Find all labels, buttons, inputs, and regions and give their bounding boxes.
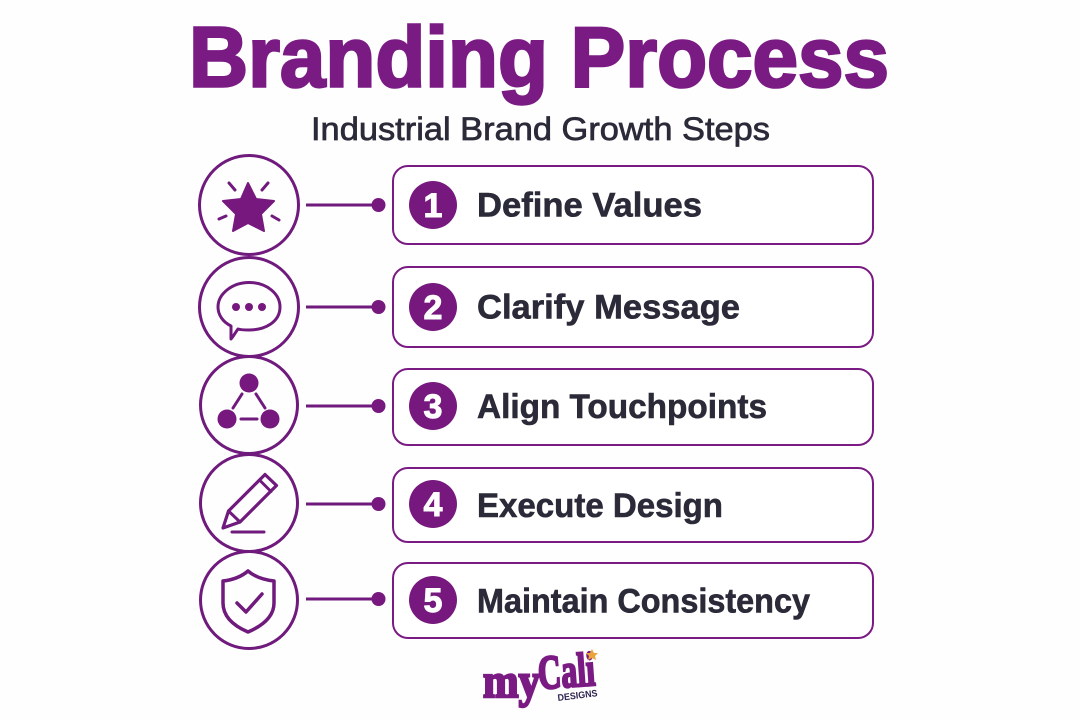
connector 3 — [306, 399, 386, 413]
label 3: Align Touchpoints — [477, 388, 767, 426]
logo: myCali Designs: my — [483, 655, 540, 708]
card 4 — [393, 468, 873, 542]
label 2: Clarify Message — [477, 288, 740, 326]
logo: myCali Designs: DESIGNS — [557, 688, 598, 704]
number badge 1: 1 — [424, 187, 442, 225]
icon: shield check — [200, 552, 298, 648]
icon: network triangle — [200, 356, 298, 454]
number badge 4 — [409, 480, 457, 528]
step 4: execute design — [200, 454, 873, 552]
step 5: maintain consistency — [200, 552, 873, 648]
label 5: Maintain Consistency — [477, 582, 810, 620]
number badge 2: 2 — [424, 289, 442, 327]
number badge 4: 4 — [424, 486, 443, 524]
number badge 3 — [409, 382, 457, 430]
connector 5 — [306, 592, 386, 606]
card 1 — [393, 166, 873, 244]
connector 2 — [306, 300, 386, 314]
subtitle: Industrial Brand Growth Steps — [311, 111, 770, 147]
connector 4 — [306, 497, 386, 511]
card 5 — [393, 563, 873, 638]
number badge 1 — [409, 181, 457, 229]
number badge 5: 5 — [424, 582, 442, 620]
step 2: clarify message — [200, 258, 873, 356]
card 2 — [393, 267, 873, 347]
icon: speech bubble — [200, 258, 298, 356]
icon: pencil — [200, 454, 298, 552]
logo: myCali Designs — [483, 643, 598, 708]
label 1: Define Values — [477, 186, 702, 224]
card 3 — [393, 369, 873, 445]
number badge 3: 3 — [424, 388, 442, 426]
number badge 5 — [409, 576, 457, 624]
label 4: Execute Design — [477, 487, 723, 525]
icon: star — [200, 156, 298, 254]
connector 1 — [306, 198, 386, 212]
step 3: align touchpoints — [200, 356, 873, 454]
step 1: define values — [200, 156, 873, 254]
title: Branding Process — [189, 10, 889, 106]
number badge 2 — [409, 283, 457, 331]
logo: myCali Designs: Cali — [536, 643, 597, 700]
